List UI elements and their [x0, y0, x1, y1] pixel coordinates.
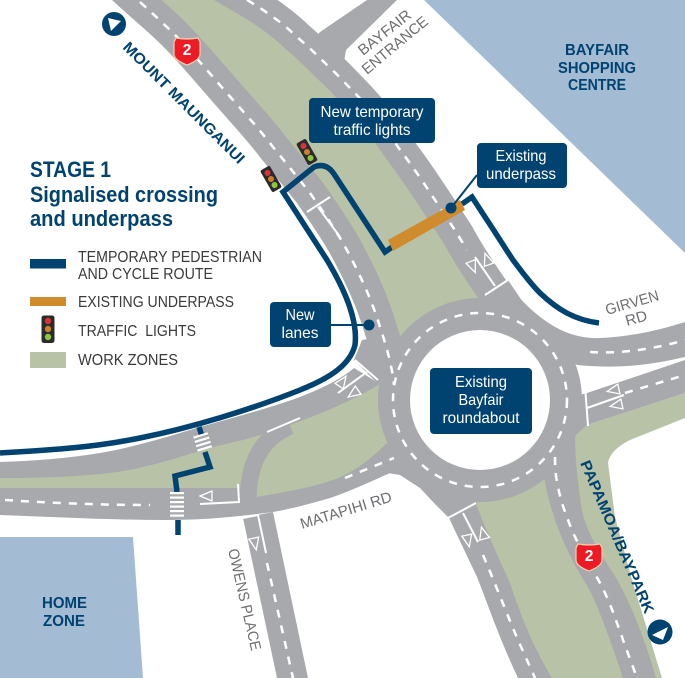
legend: temporary route: TEMPORARY PEDESTRIAN: [78, 249, 262, 266]
shield: SH2 north: [174, 38, 200, 65]
traffic lights: west: [260, 165, 282, 193]
road: eastern carriageway north: [205, 0, 497, 296]
road: west approach (upper): [0, 368, 380, 478]
road: Matapihi Rd and west approach (lower): [0, 443, 410, 520]
callout: new lanes: [270, 302, 374, 347]
title: and underpass: [30, 206, 173, 231]
temporary route: crossing link: [175, 427, 210, 535]
label: Papamoa/Baypark: PAPAMOA/BAYPARK: [576, 458, 657, 616]
callout: existing Bayfair roundabout: Existing: [455, 374, 507, 391]
shield: SH2 south: [576, 544, 602, 571]
callout: new lanes: New: [286, 307, 315, 324]
shield: SH2 north: 2: [183, 42, 191, 59]
label: Girven Rd: RD: [623, 307, 649, 330]
legend: traffic lights: [42, 316, 196, 343]
road: south-east carriageway: [540, 430, 656, 678]
temporary route: main: [0, 166, 395, 453]
legend: existing underpass: [30, 294, 234, 311]
callout: existing Bayfair roundabout: roundabout: [442, 410, 520, 427]
road: Girven Rd: [505, 281, 685, 367]
Bayfair shopping centre block: CENTRE: [568, 77, 626, 94]
road: south-west ring flare: [388, 440, 477, 518]
legend: temporary route: AND CYCLE ROUTE: [78, 266, 213, 283]
road: Owens Place: [243, 512, 308, 678]
zebra crossing: upper: [193, 432, 212, 452]
label: Mount Maunganui: MOUNT MAUNGANUI: [119, 39, 248, 168]
legend: work zones: [30, 352, 178, 369]
legend: existing underpass: EXISTING UNDERPASS: [78, 294, 234, 311]
lane lines and stop lines: [200, 197, 624, 553]
road: Bayfair entrance: [312, 0, 397, 72]
label: Bayfair Entrance: ENTRANCE: [359, 13, 432, 78]
callout: new lanes: lanes: [282, 325, 318, 342]
legend: [30, 249, 262, 369]
road: Papamoa approach: [565, 360, 685, 445]
temporary route: east of underpass: [462, 197, 599, 323]
road: east carriageway junction flare: [470, 280, 535, 320]
callout: new temporary traffic lights: traffic lights: [334, 122, 410, 139]
legend: traffic lights: TRAFFIC LIGHTS: [78, 323, 196, 340]
callout: existing underpass: underpass: [486, 166, 556, 183]
direction icon: Mount Maunganui: [102, 12, 126, 36]
Bayfair shopping centre block: BAYFAIR: [565, 42, 629, 59]
label: Matapihi Rd: MATAPIHI RD: [298, 489, 394, 533]
zebra crossing: lower: [170, 492, 184, 517]
title: [30, 157, 218, 231]
title: Signalised crossing: [30, 182, 218, 207]
Bayfair shopping centre block: SHOPPING: [558, 60, 636, 77]
road: western carriageway north: [115, 0, 393, 378]
roundabout island: [410, 330, 550, 470]
shield: SH2 south: 2: [585, 548, 593, 565]
legend: work zones: WORK ZONES: [78, 352, 178, 369]
Home Zone block: HOME: [42, 595, 87, 612]
callout: existing Bayfair roundabout: Bayfair: [458, 392, 504, 409]
callout: new temporary traffic lights: New temporary: [320, 104, 424, 121]
direction icon: Papamoa: [648, 620, 672, 644]
label: Bayfair Entrance: BAYFAIR: [355, 7, 415, 59]
traffic lights: east: [296, 138, 318, 166]
Home Zone block: [0, 537, 143, 678]
road: roundabout ring: [378, 298, 582, 502]
callout: existing underpass: [446, 143, 567, 214]
Bayfair shopping centre block: [424, 0, 685, 253]
underpass bar: [388, 200, 465, 251]
Home Zone block: ZONE: [43, 613, 85, 630]
title: STAGE 1: [30, 157, 111, 182]
road: south-west carriageway: [449, 504, 552, 678]
label: Girven Rd: GIRVEN: [603, 287, 661, 319]
callout: new temporary traffic lights: [309, 98, 435, 143]
road: north junction flare: [354, 335, 398, 384]
legend: temporary route: [30, 249, 262, 283]
label: Owens Place: OWENS PLACE: [224, 547, 264, 652]
road: slip lane: [248, 426, 290, 502]
callout: existing underpass: Existing: [496, 148, 546, 165]
callout: existing Bayfair roundabout: [430, 368, 532, 434]
